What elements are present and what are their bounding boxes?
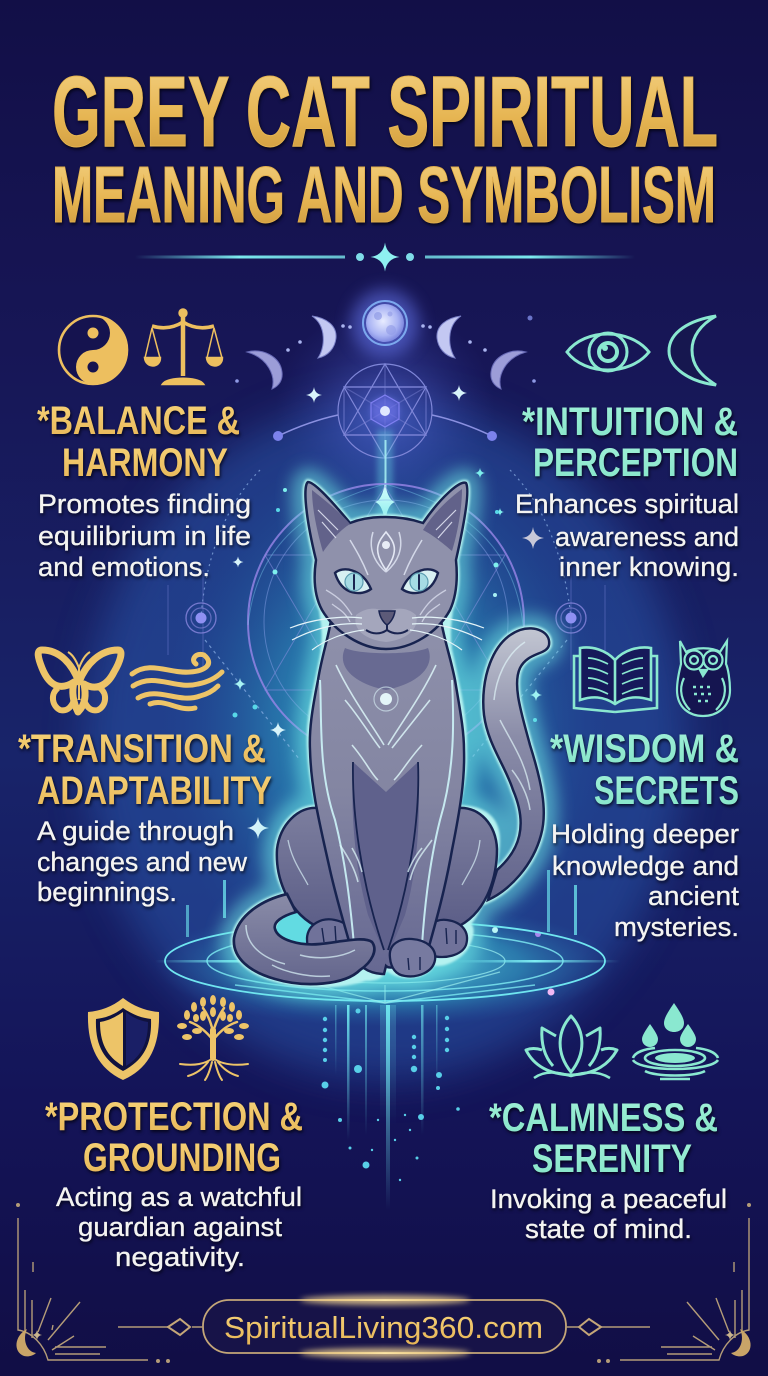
cosmic rings behind cat — [168, 470, 605, 760]
icon: crescent moon — [669, 316, 716, 385]
description: inner knowing. — [559, 552, 739, 582]
heading: *TRANSITION & — [18, 727, 266, 771]
divider ornament — [135, 242, 635, 272]
description — [515, 489, 739, 582]
description: guardian against — [78, 1212, 283, 1242]
description: knowledge and — [552, 851, 739, 881]
sacred geometry — [273, 364, 497, 458]
description: mysteries. — [614, 912, 739, 942]
ground light pillars — [186, 870, 577, 937]
footer website badge: SpiritualLiving360.com — [224, 1310, 543, 1345]
heading: *CALMNESS & — [489, 1096, 718, 1140]
heading — [522, 400, 738, 485]
heading — [37, 399, 240, 485]
description: Acting as a watchful — [56, 1182, 302, 1212]
haunches — [277, 808, 497, 945]
eyes — [335, 569, 438, 593]
moon phases — [235, 289, 536, 389]
icon: eye — [567, 333, 649, 371]
heading: ADAPTABILITY — [37, 769, 272, 813]
whiskers — [290, 617, 484, 650]
muzzle — [355, 609, 417, 642]
description — [38, 489, 251, 582]
icon: scales — [145, 310, 222, 384]
description: Enhances spiritual — [515, 489, 739, 519]
heading — [18, 727, 272, 813]
upright tail — [483, 628, 549, 900]
cat head — [290, 482, 484, 650]
light beam above cat — [375, 430, 395, 530]
panel: protection and grounding — [45, 995, 303, 1272]
torso and legs — [310, 615, 464, 974]
cat illustration — [234, 482, 549, 985]
orbit node left — [186, 603, 216, 633]
description: Invoking a peaceful — [490, 1184, 727, 1214]
icon: shield — [88, 998, 159, 1080]
panel: transition and adaptability — [18, 650, 272, 907]
cat glow — [234, 482, 549, 985]
title — [52, 56, 718, 239]
icon: owl — [677, 641, 730, 716]
description — [490, 1184, 727, 1244]
front paw — [390, 939, 435, 976]
icon: water drops and ripples — [633, 1003, 718, 1079]
light rays below cat — [322, 1005, 460, 1210]
description: negativity. — [115, 1242, 245, 1272]
icon: yin yang — [59, 316, 127, 384]
description: A guide through — [37, 816, 234, 846]
heading — [550, 727, 739, 813]
heading: SERENITY — [532, 1137, 692, 1181]
heading — [489, 1096, 718, 1181]
heading: *BALANCE & — [37, 399, 240, 443]
description: ancient — [648, 881, 740, 911]
heading: HARMONY — [62, 441, 228, 485]
icon: tree of life — [177, 995, 249, 1080]
orbit node right — [556, 603, 586, 633]
description: beginnings. — [37, 877, 177, 907]
icon: butterfly — [38, 650, 121, 712]
central glow — [85, 302, 685, 1080]
rear paws — [307, 919, 467, 957]
description: equilibrium in life — [38, 521, 251, 551]
description: awareness and — [555, 522, 739, 552]
footer website badge — [118, 1295, 650, 1358]
description — [56, 1182, 302, 1272]
heading: *PROTECTION & — [45, 1095, 303, 1139]
sparkles — [232, 385, 544, 839]
icon: lotus — [526, 1016, 617, 1078]
panel: calmness and serenity — [489, 1003, 727, 1244]
ground tail — [234, 894, 374, 984]
heading — [45, 1095, 303, 1180]
panel: wisdom and secrets — [550, 641, 740, 942]
description: state of mind. — [525, 1214, 692, 1244]
heading: GROUNDING — [83, 1136, 281, 1180]
icon: open book — [574, 648, 657, 712]
description: Holding deeper — [551, 819, 739, 849]
description: and emotions. — [38, 552, 210, 582]
ground rings — [155, 921, 620, 1003]
description — [37, 816, 247, 907]
icon: wind — [132, 654, 222, 709]
corner ornament right — [598, 1204, 751, 1362]
panel: balance and harmony — [37, 310, 251, 582]
corner ornament left — [16, 1204, 169, 1362]
description — [551, 819, 740, 942]
description: changes and new — [37, 847, 247, 877]
description: Promotes finding — [38, 489, 251, 519]
panel: intuition and perception — [515, 316, 739, 582]
heading: *WISDOM & — [550, 727, 739, 771]
